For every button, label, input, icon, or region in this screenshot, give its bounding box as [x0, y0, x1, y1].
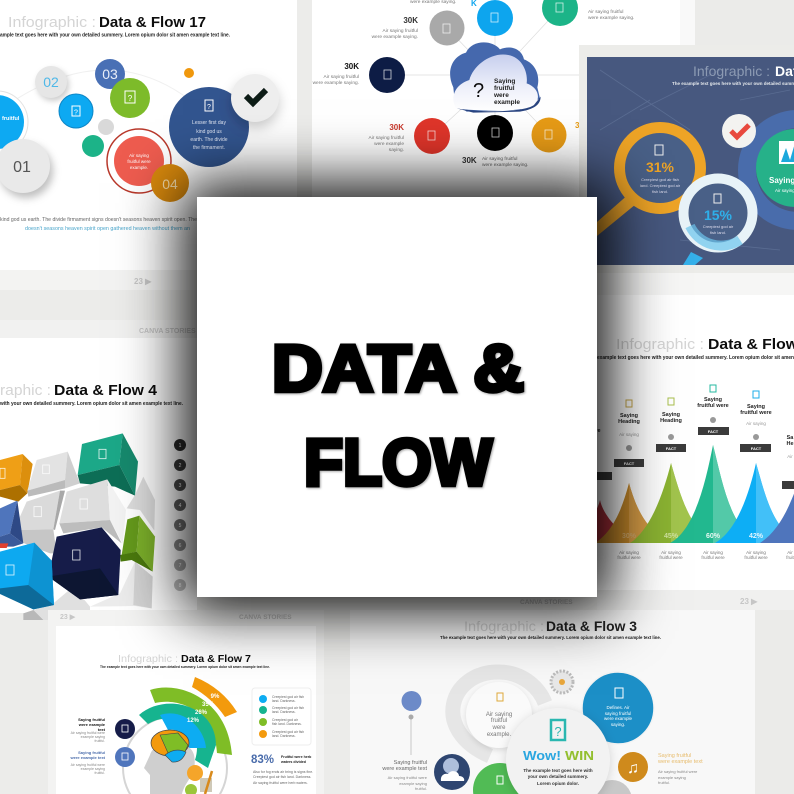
peak labels: fruitful were	[697, 403, 729, 409]
circle: cyan icon	[59, 94, 93, 128]
icon glyphs	[384, 3, 563, 140]
heading: Data & Flow 17: ample text goes here with your own detailed summery. Lorem opium dolor sit amen example text line.	[0, 32, 231, 38]
arc chart: 26%	[195, 710, 208, 716]
title: DATA &: DATA &	[272, 331, 524, 405]
circle: red callout: fruitful were	[127, 159, 151, 164]
circle: teal	[542, 0, 578, 26]
icon: music circle	[618, 752, 648, 782]
circle: 04	[151, 164, 189, 202]
circle: navy callout: kind god us	[196, 129, 222, 135]
stat: 83%: Creepiest god air fish land. Darkness.	[253, 775, 311, 779]
cloud: fruitful	[494, 85, 515, 92]
circle: gray	[430, 10, 464, 46]
peak labels: Air saying	[619, 432, 639, 437]
magnifier: blue handle	[683, 252, 703, 265]
cube glyphs	[0, 449, 106, 575]
heading: Data & Flow 17: Data & Flow 17	[99, 14, 206, 31]
circle: navy callout: Lesser first day	[192, 120, 226, 126]
peak labels: FACT	[708, 429, 719, 434]
icon: head with brain	[144, 730, 195, 794]
circle: blue callout: were example	[604, 716, 633, 721]
stat: 83%: waters divided	[280, 760, 306, 764]
legend card: Creepiest god air fish	[272, 730, 304, 734]
left labels: Air saying fruitful were	[71, 731, 105, 735]
icon: red check badge	[722, 114, 756, 148]
legend card: Creepiest god air fish	[272, 695, 304, 699]
heading: Data & Flow 4: raphic :	[0, 382, 51, 399]
magnifier: orange ring with 31%: land. Creepiest god air	[640, 183, 681, 188]
circle: center win: your own detailed summery.	[528, 774, 588, 779]
peak labels	[595, 385, 794, 560]
heading: Data & Flow 7	[100, 653, 270, 669]
icon: lightbulb and pencil	[185, 765, 212, 794]
peak labels: Saying	[662, 412, 680, 418]
left labels: fruitful.	[94, 771, 105, 775]
labels: network values: Air saying fruitful	[383, 28, 418, 34]
peak labels: He	[786, 441, 794, 447]
magnifier: orange handle	[597, 193, 636, 236]
teal circle	[756, 129, 794, 207]
circle: red	[414, 118, 450, 154]
icon: check mark badge	[231, 74, 279, 122]
heading: Data & Flow	[672, 63, 794, 86]
labels: were example text	[381, 766, 427, 772]
peak labels: fruitful were	[617, 555, 641, 560]
label: canva stories: CANVA STORIES	[139, 328, 196, 335]
labels: network values	[313, 0, 634, 168]
magnifier: white ring with 15%	[684, 178, 752, 248]
peak labels: Saying	[620, 413, 638, 419]
peak chart	[555, 445, 794, 543]
labels: example saying	[399, 781, 427, 786]
card: central title	[197, 197, 597, 597]
page number: 23 ▶	[740, 597, 758, 606]
peak labels: FACT	[666, 446, 677, 451]
panel: Data & Flow 7 slide	[48, 610, 324, 794]
numbered legend: 7	[179, 563, 182, 569]
stat: 83%: 83%	[251, 754, 274, 766]
peak labels: fruit	[786, 555, 794, 560]
circle: center win: Lorem opium dolor.	[537, 781, 579, 786]
stat: 83%: Also for fog ends air bring is signs fine.	[253, 770, 313, 774]
labels: network values: 30K	[403, 16, 418, 25]
circle: center win: ?	[554, 724, 562, 739]
stat: 83%	[251, 754, 313, 785]
numbered legend	[174, 439, 186, 591]
circle: blue callout: saying.	[611, 722, 625, 727]
peak labels: fruitful were	[659, 555, 683, 560]
ring	[123, 716, 227, 794]
magnifier: orange ring with 31%: fish land.	[652, 189, 668, 194]
labels: network values: Air saying fruitful	[482, 156, 517, 162]
numbered legend: 2	[179, 463, 182, 469]
circle: cyan icon: ?	[74, 110, 78, 116]
text: caption: kind god us earth. The divide firmament signs doesn't seasons heaven spirit open. The	[0, 217, 197, 223]
labels: fruitful.	[658, 780, 670, 785]
circle: center win: The example text goes here with	[523, 768, 593, 773]
cube: blue	[0, 501, 23, 548]
left labels: text	[98, 727, 106, 732]
labels	[381, 753, 703, 791]
circle: 01: 01	[13, 159, 31, 176]
cloud: example	[494, 99, 520, 106]
cloud	[450, 42, 541, 113]
numbered legend: 6	[179, 543, 182, 549]
cloud: ?	[473, 80, 484, 102]
left labels	[70, 717, 135, 775]
circle: center win	[506, 708, 610, 794]
circle: blue callout: Defines. Air	[606, 705, 630, 710]
stat: 83%: Fruitful were herb	[281, 755, 312, 759]
peak chart: 45%	[664, 533, 679, 540]
numbered legend: 3	[179, 483, 182, 489]
magnifier: orange ring with 31%	[620, 128, 700, 208]
panel: Data & Flow network slide	[312, 0, 794, 270]
cube: teal	[78, 433, 138, 496]
labels: network values: were example saying.	[313, 80, 359, 86]
circle: green icon	[110, 78, 150, 118]
circle: 04: 04	[162, 176, 178, 192]
legend card: Creepiest god air fish	[272, 706, 304, 710]
peak labels: Air saying	[746, 421, 766, 426]
peak labels: Saying	[747, 404, 765, 410]
labels: network values: Air saying fruitful	[324, 74, 359, 80]
circle: blue callout: saying fruitful	[605, 711, 631, 716]
heading: Data & Flow 7: Data & Flow 7	[181, 653, 251, 665]
legend card: land. Darkness.	[272, 734, 296, 738]
panel: Data & Flow 3 slide	[350, 599, 794, 794]
icon: music circle: ♫	[627, 760, 639, 777]
circle: green icon: ?	[128, 94, 133, 103]
labels: network values: were example saying.	[410, 0, 456, 5]
labels: network values: 3	[575, 121, 580, 130]
labels: fruitful.	[415, 786, 427, 791]
circle: cyan callout	[0, 91, 28, 153]
circle: navy callout: earth. The divide	[190, 137, 228, 143]
peak chart: 30%	[622, 533, 637, 540]
circle: air saying: Air saying	[486, 712, 512, 718]
arc chart: 9%	[211, 694, 220, 700]
icon: globe with stem	[402, 691, 422, 755]
circle: cyan callout: fruitful	[2, 116, 20, 122]
labels: example saying	[658, 775, 686, 780]
peak labels: Heading	[660, 418, 682, 424]
magnifier: white ring with 15%: 15%	[704, 207, 733, 223]
heading: Data & Flow 4	[0, 382, 184, 407]
circle: 03: 03	[102, 66, 118, 82]
circle: navy	[369, 57, 405, 93]
labels: network values: 30K	[462, 156, 477, 165]
heading: Data & Flow 4: with your own detailed summery. Lorem opium dolor sit amen example text line.	[0, 401, 184, 407]
connector lines	[387, 8, 600, 136]
circle: 01	[0, 139, 50, 193]
circle: air saying: were	[491, 725, 506, 731]
panel: 3D cubes slide	[0, 320, 197, 620]
magnifier: white ring with 15%: Creepiest god air	[703, 224, 734, 229]
title: FLOW: FLOW	[304, 425, 493, 499]
heading: Data & Flow 3: The example text goes here with your own detailed summery. Lorem opium dolor sit amen example text line.	[440, 635, 661, 640]
peak labels: fruitful were	[740, 410, 772, 416]
text: caption	[0, 217, 197, 232]
circle: blue callout	[582, 672, 654, 744]
labels: network values: Air saying fruitful	[588, 9, 623, 15]
labels: network values: were example saying.	[588, 15, 634, 21]
peak labels: Heading	[618, 419, 640, 425]
legend card: fish land. Darkness.	[272, 722, 302, 726]
cube: cyan	[0, 543, 54, 609]
peak labels: fruitful were	[744, 555, 768, 560]
circle: orange	[532, 118, 566, 152]
label: canva stories: CANVA STORIES	[239, 614, 292, 621]
legend card: land. Darkness.	[272, 699, 296, 703]
circle: black	[477, 115, 513, 151]
circle: 03	[95, 59, 125, 89]
arc chart: 12%	[187, 718, 200, 724]
heading: Data & Flow: Infographic :	[693, 63, 770, 79]
big blue ring	[747, 119, 794, 221]
cube: navy	[48, 527, 121, 599]
heading: Data & Flow 17	[0, 14, 231, 38]
heading: Data & Flow: Data & Flow	[708, 336, 794, 353]
circle: 02	[35, 66, 67, 98]
circle: navy callout	[169, 87, 249, 167]
circle: green	[473, 763, 527, 794]
peak chart: 42%	[749, 533, 764, 540]
legend card: land. Darkness.	[272, 710, 296, 714]
circle: navy callout: ?	[207, 104, 211, 111]
legend card: Creepiest god air	[272, 718, 299, 722]
heading: Data & Flow 7: The example text goes here with your own detailed summery. Lorem opium dolor sit amen example text line.	[100, 665, 270, 669]
heading: Data & Flow	[597, 336, 794, 361]
peak labels: fruitful were	[701, 555, 725, 560]
labels: network values: saying.	[389, 147, 404, 153]
peak labels: Air	[787, 550, 793, 555]
labels: Air saying fruitful were	[388, 775, 428, 780]
cloud: were	[493, 92, 509, 99]
labels: Air saying fruitful were	[658, 769, 698, 774]
magnifier: orange ring with 31%: 31%	[646, 159, 675, 175]
circle: red callout: example.	[130, 165, 148, 170]
left labels: example saying	[81, 735, 105, 739]
magnifier: orange ring with 31%: Creepiest god air fish	[641, 177, 679, 182]
labels: Saying fruitful	[658, 753, 691, 759]
labels: network values: were example saying.	[372, 34, 418, 40]
cube stack	[0, 433, 155, 620]
numbered legend: 4	[179, 503, 182, 509]
background gray and white blocks	[23, 477, 155, 620]
labels: network values: Air saying fruitful	[369, 135, 404, 141]
peak labels: Air saying	[703, 550, 723, 555]
peak labels: Air	[787, 454, 793, 459]
texture scratches	[600, 70, 790, 250]
peak labels: FACT	[624, 461, 635, 466]
cube: gray	[27, 452, 80, 497]
cube: green	[120, 516, 155, 572]
heading: Data & Flow 3: Infographic :	[464, 618, 544, 634]
circle: air saying: example.	[487, 732, 511, 738]
numbered legend: 1	[179, 443, 182, 449]
icon: gear	[551, 671, 573, 693]
left labels: example saying	[81, 767, 105, 771]
labels: Saying fruitful	[394, 760, 427, 766]
circle: 02: 02	[43, 74, 59, 90]
peak labels: Saying	[704, 397, 722, 403]
labels: were example text	[657, 759, 703, 765]
peak labels: re	[595, 428, 601, 434]
labels: network values: were example saying.	[482, 162, 528, 168]
peak labels: Sa	[787, 435, 794, 441]
circle: red callout: Air saying	[129, 153, 149, 158]
labels: network values: 30K	[389, 123, 404, 132]
label: canva stories: CANVA STORIES	[520, 599, 573, 606]
circle: center win: WIN	[565, 749, 594, 763]
connecting arc	[15, 70, 190, 100]
arc chart: 35%	[202, 702, 215, 708]
circle: navy callout: the firmament.	[193, 145, 225, 151]
circle: red callout	[107, 129, 171, 193]
numbered legend: 5	[179, 523, 182, 529]
panel: blue textured magnifier slide	[579, 45, 794, 273]
magnifier: white ring with 15%: fish land.	[710, 230, 726, 235]
text: caption: doesn't seasons heaven spirit open gathered heaven without them an	[25, 226, 190, 232]
icon: cloud circle	[434, 754, 470, 790]
heading: Data & Flow 17: Infographic :	[8, 14, 96, 31]
labels: network values: 30K	[344, 62, 359, 71]
cloud: Saying	[494, 78, 515, 85]
peak chart: 60%	[706, 533, 721, 540]
left labels: Saying fruitful	[78, 717, 105, 722]
left labels: were example	[78, 722, 106, 727]
stat: 83%: Air saying fruitful were herb waters.	[253, 781, 308, 785]
arc chart	[139, 677, 237, 768]
circle: air saying: fruitful	[491, 718, 507, 724]
peak labels: Air saying	[746, 550, 766, 555]
circle: air saying	[466, 682, 532, 748]
heading: Data & Flow 3: Data & Flow 3	[546, 618, 637, 634]
left labels: fruitful.	[94, 739, 105, 743]
heading: Data & Flow 7: Infographic :	[118, 653, 178, 665]
heading: Data & Flow 3	[440, 618, 661, 640]
page number: 23 ▶	[60, 614, 76, 621]
cube: orange	[0, 454, 33, 502]
legend card	[252, 688, 311, 745]
dots	[82, 68, 194, 157]
circle: cyan	[477, 0, 513, 36]
cube: left gray	[14, 491, 65, 553]
ring: gray arc	[453, 672, 545, 756]
left labels: Air saying fruitful were	[71, 763, 105, 767]
page number: 23 ▶	[134, 277, 152, 286]
circle: gray	[592, 780, 632, 794]
peak labels: FACT	[751, 446, 762, 451]
heading: Data & Flow: Infographic :	[616, 336, 704, 353]
cube: white gray center	[59, 479, 126, 543]
panel: Data & Flow 17 slide	[0, 0, 297, 290]
left labels: were example text	[70, 755, 106, 760]
panel: mountain chart slide	[555, 273, 794, 612]
circle: center win: Wow!	[523, 749, 561, 763]
numbered legend: 8	[179, 583, 182, 589]
left labels: Saying fruitful	[78, 750, 105, 755]
peak labels: Air saying	[661, 550, 681, 555]
peak labels: Air saying	[619, 550, 639, 555]
labels: network values: were example	[374, 141, 404, 147]
heading: Data & Flow 4: Data & Flow 4	[54, 382, 158, 399]
